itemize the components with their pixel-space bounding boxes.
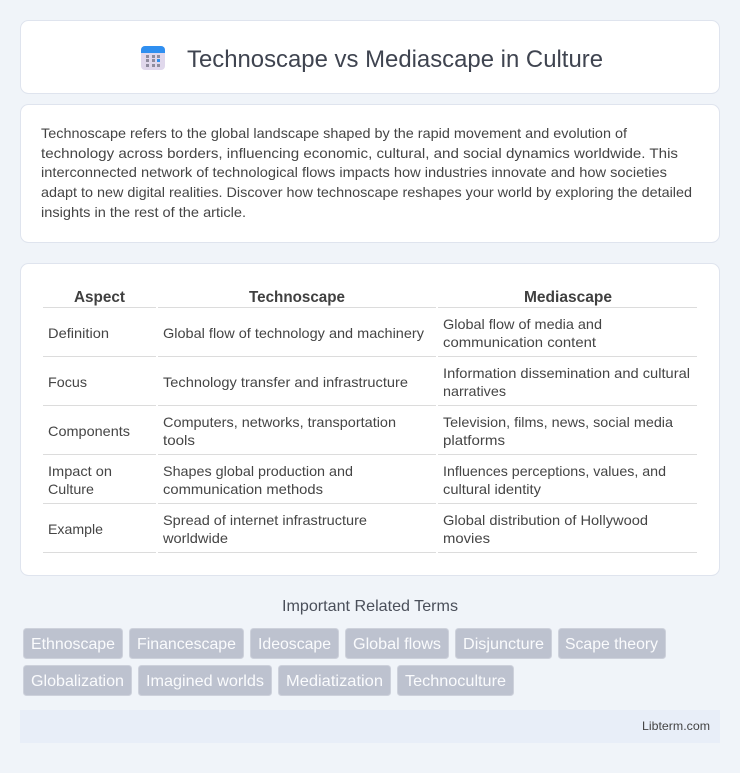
table header row: Aspect [74, 289, 126, 306]
table row: example: movies [443, 530, 490, 546]
table row: definition [48, 316, 602, 350]
text block: introduction paragraph: insights in the rest of the article. [41, 204, 246, 220]
table row: example: Global distribution of Hollywood [443, 512, 648, 528]
tag: Scape theory [558, 628, 666, 658]
table row: definition: Definition [48, 325, 109, 341]
tag: Ideoscape [250, 628, 338, 658]
table row: impact on culture: Impact on [48, 463, 112, 479]
heading: important related terms: Important Related Terms [282, 598, 458, 615]
table row: impact on culture: Culture [48, 481, 94, 497]
table header row: Technoscape [249, 289, 345, 306]
table row: components: Components [48, 423, 130, 439]
table row: example: Example [48, 521, 103, 537]
text block: introduction paragraph: interconnected network of technological flows impacts how industries innovate and how societies [41, 164, 667, 180]
tag: Global flows [346, 628, 448, 658]
table header row [74, 289, 612, 306]
table row: components: tools [163, 432, 195, 448]
text block: introduction paragraph: adapt to new digital realities. Discover how technoscape reshapes your world by exploring the detailed [41, 184, 692, 200]
table row: components: platforms [443, 432, 505, 448]
tag: Imagined worlds [138, 666, 272, 696]
table row: components [48, 414, 673, 448]
text block: introduction paragraph: technology across borders, influencing economic, cultural, and social dynamics worldwide. This [41, 145, 678, 161]
panel: header [20, 20, 720, 94]
tag: Globalization: Globalization [31, 673, 124, 690]
table row: definition: Global flow of media and [443, 316, 602, 332]
tag: Globalization [24, 666, 132, 696]
table row: impact on culture: Shapes global production and [163, 463, 353, 479]
table row: focus [48, 365, 690, 399]
tag: Global flows: Global flows [353, 636, 441, 653]
title: Technoscape vs Mediascape in Culture [187, 46, 603, 73]
tag: Mediatization [278, 666, 390, 696]
panel: comparison table [20, 264, 720, 576]
table row: definition: communication content [443, 334, 596, 350]
table row: impact on culture: Influences perceptions, values, and [443, 463, 666, 479]
table row: impact on culture: communication methods [163, 481, 323, 497]
tag: Ideoscape: Ideoscape [258, 636, 331, 653]
table row: example [48, 512, 648, 546]
tag: Mediatization: Mediatization [286, 673, 383, 690]
table header row: Mediascape [524, 289, 612, 306]
tag: Disjuncture [456, 628, 552, 658]
tag: Ethnoscape [24, 628, 122, 658]
table row: focus: Information dissemination and cultural [443, 365, 690, 381]
text block: introduction paragraph [41, 125, 692, 220]
table row: components: Television, films, news, social media [443, 414, 673, 430]
tag: Financescape: Financescape [137, 636, 236, 653]
tag: Technoculture [398, 666, 514, 696]
tag: Imagined worlds: Imagined worlds [146, 673, 264, 690]
table row: components: Computers, networks, transportation [163, 414, 396, 430]
table row: example: worldwide [162, 530, 228, 546]
table row: focus: Focus [48, 374, 87, 390]
table row: focus: narratives [443, 383, 506, 399]
text block: introduction paragraph: Technoscape refers to the global landscape shaped by the rapid movement and evolution of [41, 125, 627, 141]
table row: impact on culture: cultural identity [443, 481, 541, 497]
tag: Technoculture: Technoculture [405, 673, 506, 690]
table row: example: Spread of internet infrastructure [163, 512, 367, 528]
footer: Libterm.com [642, 719, 710, 733]
tag: Disjuncture: Disjuncture [463, 636, 544, 653]
tag: Financescape [130, 628, 244, 658]
tag: Ethnoscape: Ethnoscape [31, 636, 115, 653]
panel: introduction [20, 104, 720, 242]
tag: Scape theory: Scape theory [565, 636, 658, 653]
table row: focus: Technology transfer and infrastructure [163, 374, 408, 390]
icon: calendar [141, 46, 165, 70]
table row: definition: Global flow of technology and machinery [163, 325, 424, 341]
tag list: related terms [24, 628, 666, 696]
footer [20, 710, 720, 743]
table row: impact on culture [48, 463, 666, 497]
